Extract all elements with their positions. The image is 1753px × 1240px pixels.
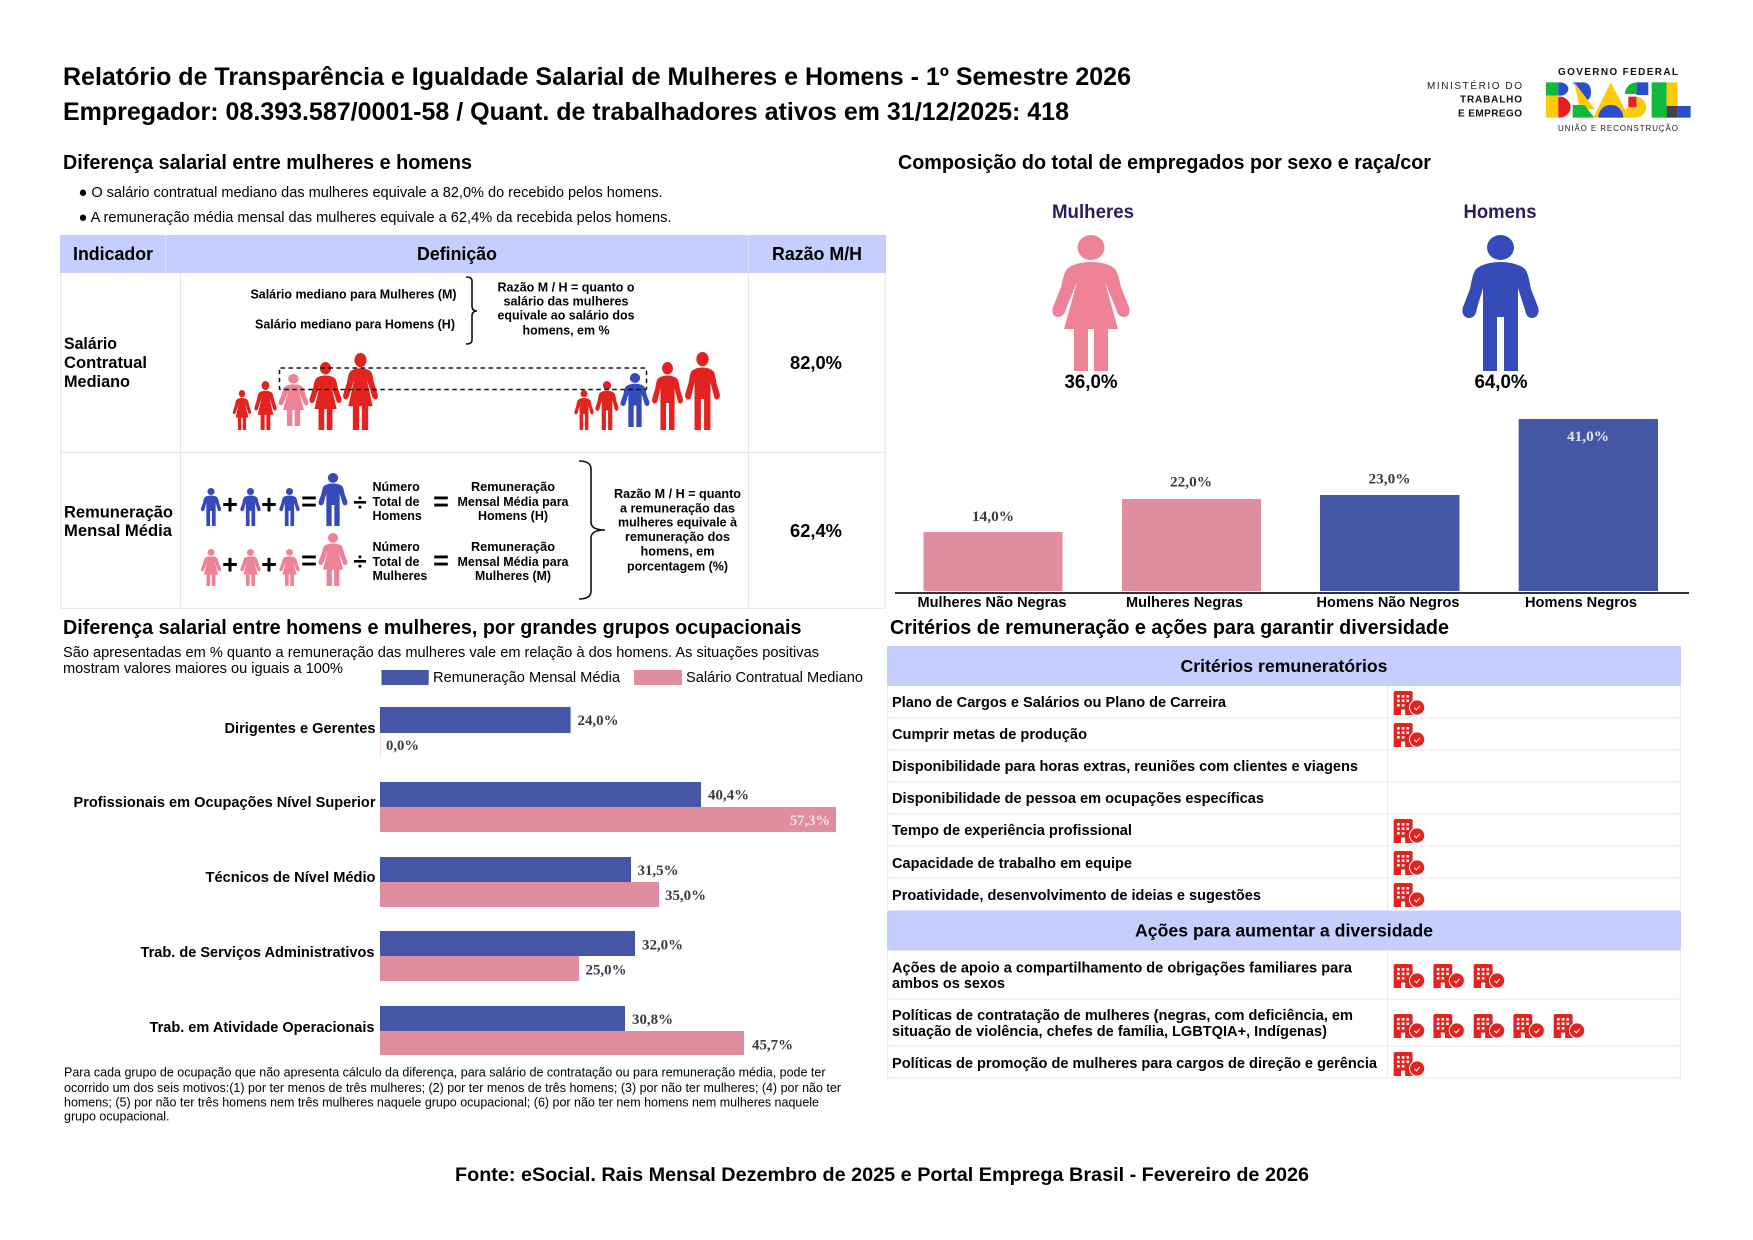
group: atividade operacionais: 30,8%: [632, 1012, 673, 1028]
text: footnote: grupo ocupacional.: [64, 1108, 170, 1124]
row: salário contratual mediano: [64, 277, 842, 430]
row: remuneração mensal média: [64, 461, 842, 599]
bar chart: sexo e raça: 14,0%: [972, 509, 1014, 525]
definition text: salário das mulheres: [504, 294, 629, 308]
row labels: [892, 695, 1358, 904]
table header: Razão M/H: [772, 244, 862, 264]
bar chart: grupos ocupacionais: [74, 707, 836, 1055]
formula: women: +: [261, 550, 277, 580]
row labels: Plano de Cargos e Salários ou Plano de Carreira: [892, 695, 1227, 711]
icons: company check: [1394, 964, 1585, 1076]
definition text: remuneração dos: [625, 530, 730, 544]
formula: men: +: [261, 490, 277, 520]
row labels: Disponibilidade de pessoa em ocupações específicas: [892, 791, 1264, 807]
text: description: [63, 645, 819, 677]
group: dirigentes e gerentes: 0,0%: [386, 738, 419, 754]
formula: men: =: [301, 486, 317, 516]
text: bullet points: [78, 184, 672, 226]
formula: women: Número: [372, 540, 420, 554]
formula: women: Mulheres (M): [475, 569, 551, 583]
value 82,0%: 82,0%: [790, 352, 842, 373]
panel: grandes grupos ocupacionais: [63, 617, 863, 1124]
indicator label: [64, 504, 173, 540]
bar chart: sexo e raça: 41,0%: [1567, 429, 1609, 445]
figure: mulheres: 36,0%: [1064, 372, 1118, 393]
title: [63, 63, 1131, 126]
definition text: mulheres equivale à: [618, 516, 737, 530]
figure: homens: Homens: [1464, 202, 1536, 223]
text: footnote: homens; (5) por não ter três homens nem três mulheres naquele grupo ocupacional; (6) por não ter nem homens nem mulheres naquele: [64, 1094, 819, 1110]
row labels: Tempo de experiência profissional: [892, 823, 1132, 839]
bar chart: sexo e raça: Mulheres Não Negras: [918, 595, 1066, 611]
logo: governo federal brasil: GOVERNO FEDERAL: [1558, 67, 1678, 78]
formula: women: ÷: [353, 548, 367, 576]
formula: women: Remuneração: [471, 540, 555, 554]
row labels: Ações de apoio a compartilhamento de obrigações familiares para: [892, 960, 1353, 976]
brace: [466, 277, 477, 344]
value 62,4%: 62,4%: [790, 520, 842, 541]
indicator label: Salário: [64, 335, 117, 353]
definition text: [614, 487, 741, 574]
figures: men by pay: [574, 352, 720, 430]
group: profissionais nível superior: 57,3%: [790, 813, 830, 829]
indicator label: [64, 335, 147, 391]
formula: men: Total de: [372, 495, 420, 509]
text: bullet points: ● A remuneração média mensal das mulheres equivale a 62,4% da recebida pelos homens.: [78, 209, 672, 226]
row labels: Cumprir metas de produção: [892, 727, 1087, 743]
group: dirigentes e gerentes: 24,0%: [578, 713, 618, 729]
group: técnicos de nível médio: Técnicos de Nível Médio: [206, 870, 376, 886]
logo: governo federal brasil: UNIÃO E RECONSTRUÇÃO: [1558, 124, 1678, 133]
row labels: Proatividade, desenvolvimento de ideias e sugestões: [892, 888, 1261, 904]
legend: Remuneração Mensal Média: [433, 670, 621, 686]
group: dirigentes e gerentes: Dirigentes e Gerentes: [224, 721, 376, 737]
indicator label: Contratual: [64, 354, 147, 372]
formula: men: Remuneração: [471, 480, 555, 494]
group: técnicos de nível médio: [206, 857, 706, 907]
icons: company check: [1394, 691, 1425, 907]
heading: diferença salarial: Diferença salarial entre mulheres e homens: [63, 152, 472, 174]
logo: ministério do trabalho e emprego: TRABALHO: [1460, 94, 1522, 106]
row labels: Capacidade de trabalho em equipe: [892, 856, 1132, 872]
definition text: [498, 280, 635, 338]
logo: ministério do trabalho e emprego: E EMPREGO: [1458, 108, 1522, 120]
group: profissionais nível superior: [74, 782, 836, 832]
definition labels: Salário mediano para Mulheres (M): [250, 288, 456, 302]
table: ações para aumentar a diversidade: Ações para aumentar a diversidade: [1135, 920, 1433, 940]
bar chart: sexo e raça: 22,0%: [1170, 474, 1212, 490]
group: atividade operacionais: 45,7%: [752, 1038, 793, 1054]
dashed median box: [280, 368, 646, 390]
definition text: equivale ao salário dos: [498, 308, 635, 322]
row labels: Políticas de promoção de mulheres para cargos de direção e gerência: [892, 1056, 1378, 1072]
formula: women: [201, 533, 570, 586]
logo: ministério do trabalho e emprego: MINISTÉRIO DO: [1427, 79, 1522, 92]
group: técnicos de nível médio: 35,0%: [665, 888, 706, 904]
definition text: homens, em %: [522, 324, 610, 338]
row labels: [892, 960, 1378, 1072]
indicator label: Mensal Média: [64, 522, 173, 540]
definition text: a remuneração das: [620, 502, 735, 516]
title: Empregador: 08.393.587/0001-58 / Quant. de trabalhadores ativos em 31/12/2025: 418: [63, 98, 1069, 126]
bar chart: sexo e raça: 23,0%: [1368, 472, 1410, 488]
figures: women by pay: [233, 353, 378, 430]
big brace: [579, 461, 605, 599]
row labels: situação de violência, chefes de família, LGBTQIA+, Indígenas): [892, 1024, 1327, 1040]
heading: grupos ocupacionais: Diferença salarial entre homens e mulheres, por grandes grupos ocupacionais: [63, 617, 802, 639]
text: footnote: [64, 1064, 842, 1124]
panel: diferença salarial entre mulheres e homens: [60, 152, 886, 608]
indicator label: Mediano: [64, 373, 130, 391]
definition text: Razão M / H = quanto o: [498, 280, 635, 294]
group: profissionais nível superior: 40,4%: [708, 788, 749, 804]
formula: men: Mensal Média para: [458, 495, 570, 509]
text: description: mostram valores maiores ou iguais a 100%: [63, 661, 343, 677]
definition text: porcentagem (%): [627, 560, 728, 574]
group: serviços administrativos: 32,0%: [642, 938, 683, 954]
table header: Definição: [417, 244, 497, 264]
figure: homens: [1462, 202, 1539, 393]
formula: women: +: [222, 550, 238, 580]
definition labels: Salário mediano para Homens (H): [255, 318, 455, 332]
text: footnote: Para cada grupo de ocupação que não apresenta cálculo da diferença, para salário de contratação ou para remuneração média, pode ter: [64, 1064, 826, 1080]
definition text: homens, em: [640, 544, 714, 558]
legend: Salário Contratual Mediano: [686, 670, 863, 686]
table header: Indicador: [73, 244, 153, 264]
formula: men: ÷: [353, 490, 367, 516]
legend: [382, 670, 863, 686]
group: atividade operacionais: [150, 1006, 793, 1055]
table: ações para aumentar a diversidade: [887, 910, 1681, 1078]
group: serviços administrativos: 25,0%: [586, 962, 626, 978]
group: serviços administrativos: Trab. de Serviços Administrativos: [140, 945, 374, 961]
formula: men: [201, 473, 570, 526]
logo: governo federal brasil: [1546, 67, 1691, 133]
formula: women: =: [433, 546, 449, 576]
row labels: Disponibilidade para horas extras, reuniões com clientes e viagens: [892, 759, 1358, 775]
figure: mulheres: Mulheres: [1052, 202, 1134, 223]
formula: women: =: [301, 546, 317, 576]
text: footnote: ocorrido um dos seis motivos:(1) por ter menos de três mulheres; (2) por ter menos de três homens; (3) por não ter mulheres; (4) por não ter: [64, 1080, 842, 1095]
bar chart: sexo e raça: Homens Não Negros: [1316, 595, 1460, 611]
row labels: Políticas de contratação de mulheres (negras, com deficiência, em: [892, 1008, 1353, 1024]
row labels: ambos os sexos: [892, 976, 1005, 992]
definition text: Razão M / H = quanto: [614, 487, 741, 501]
footer: source: Fonte: eSocial. Rais Mensal Dezembro de 2025 e Portal Emprega Brasil - Fevereiro de 2026: [455, 1164, 1309, 1186]
group: serviços administrativos: [140, 931, 683, 981]
formula: men: Número: [372, 480, 420, 494]
formula: women: Mulheres: [372, 569, 427, 583]
table: critérios remuneratórios: Critérios remuneratórios: [1180, 656, 1388, 676]
definition labels: [250, 288, 456, 332]
formula: men: =: [433, 486, 449, 516]
table: critérios remuneratórios: [887, 646, 1681, 910]
bar chart: sexo e raça: Homens Negros: [1525, 595, 1637, 611]
figure: homens: 64,0%: [1474, 372, 1528, 393]
group: técnicos de nível médio: 31,5%: [638, 863, 678, 879]
title: Relatório de Transparência e Igualdade Salarial de Mulheres e Homens - 1º Semestre 2026: [63, 63, 1131, 91]
formula: men: +: [222, 490, 238, 520]
heading: composição: Composição do total de empregados por sexo e raça/cor: [898, 152, 1431, 174]
panel: critérios de remuneração e ações: [887, 617, 1681, 1078]
formula: men: Homens (H): [478, 509, 548, 523]
table header: [60, 235, 886, 273]
group: atividade operacionais: Trab. em Atividade Operacionais: [150, 1020, 374, 1036]
indicator label: Remuneração: [64, 504, 173, 522]
heading: critérios: Critérios de remuneração e ações para garantir diversidade: [890, 617, 1449, 639]
figure: mulheres: [1052, 202, 1134, 393]
text: description: São apresentadas em % quanto a remuneração das mulheres vale em relação à dos homens. As situações positivas: [63, 645, 819, 661]
formula: women: Total de: [372, 555, 420, 569]
bar chart: sexo e raça: Mulheres Negras: [1126, 595, 1243, 611]
panel: composição do total de empregados: [895, 152, 1689, 611]
table: indicador definição razão: [60, 235, 886, 608]
logo: ministério do trabalho e emprego: [1427, 79, 1522, 120]
bar chart: sexo e raça: [895, 419, 1689, 611]
group: dirigentes e gerentes: [224, 707, 618, 758]
text: bullet points: ● O salário contratual mediano das mulheres equivale a 82,0% do recebido pelos homens.: [78, 184, 662, 201]
group: profissionais nível superior: Profissionais em Ocupações Nível Superior: [74, 795, 376, 811]
formula: men: Homens: [372, 509, 422, 523]
formula: women: Mensal Média para: [458, 555, 570, 569]
